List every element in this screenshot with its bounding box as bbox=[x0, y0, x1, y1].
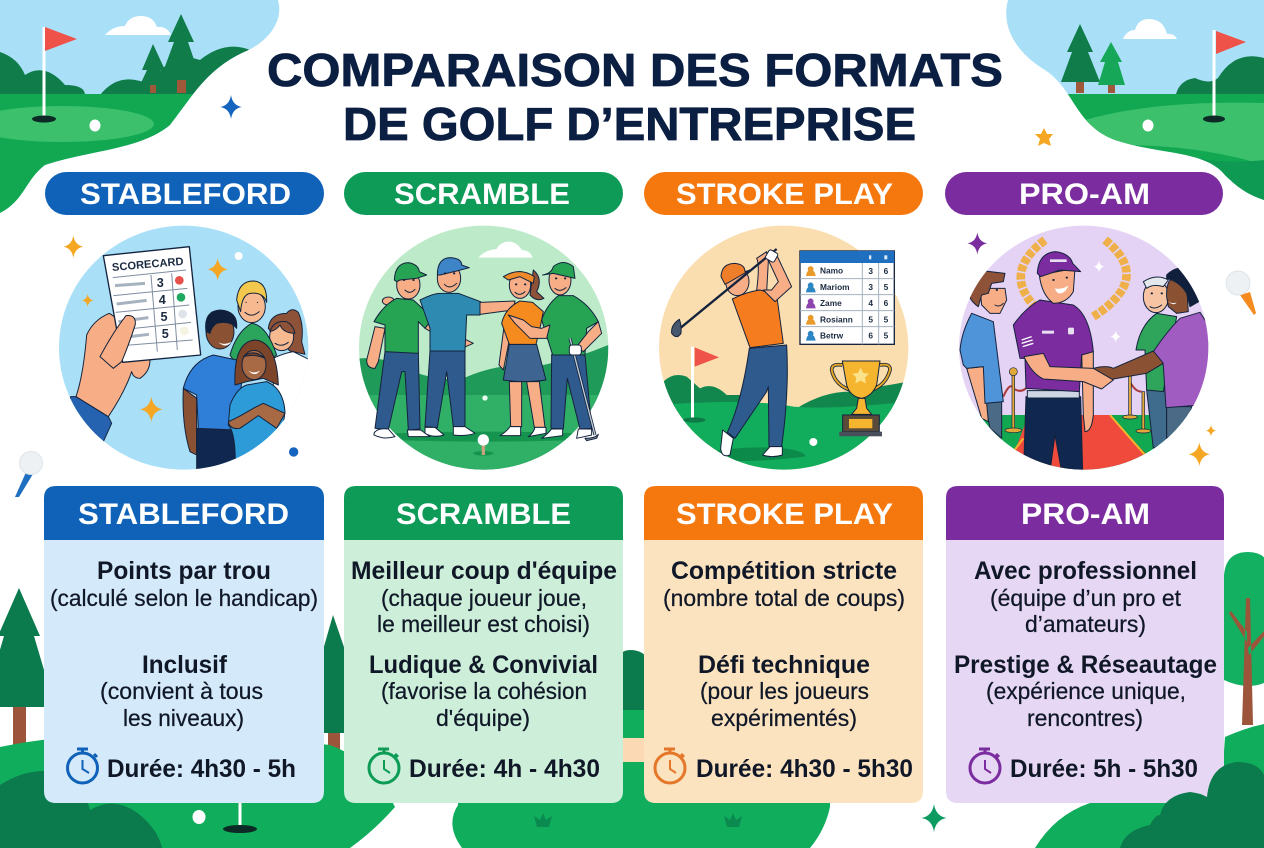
card: Scramble: Meilleur coup d'équipe bbox=[351, 557, 617, 585]
card: Scramble bbox=[344, 486, 623, 803]
pill: Scramble: SCRAMBLE bbox=[394, 178, 570, 211]
leaderboard: Mariom bbox=[820, 282, 850, 292]
card: Stableford: (calculé selon le handicap) bbox=[50, 585, 318, 611]
card: Pro-Am: Durée: 5h - 5h30 bbox=[1010, 755, 1198, 783]
leaderboard: 5 bbox=[868, 314, 873, 324]
title: DE GOLF D’ENTREPRISE bbox=[343, 98, 916, 150]
leaderboard: Zame bbox=[820, 298, 842, 308]
shirt details and faces bbox=[995, 259, 1177, 347]
stanchions bbox=[1003, 365, 1151, 433]
leaderboard: 5 bbox=[884, 314, 889, 324]
scenery: top-right golf course bbox=[1000, 0, 1264, 205]
icon: stopwatch bbox=[655, 749, 685, 783]
card: Scramble: (favorise la cohésion bbox=[381, 678, 587, 704]
golf ball on tee bbox=[473, 434, 493, 456]
illustration: Scramble team bbox=[359, 226, 608, 472]
illustration: Stableford scorecard and team bbox=[59, 226, 310, 472]
leaderboard: 3 bbox=[868, 282, 873, 292]
trophy bbox=[832, 361, 890, 436]
pill: Scramble bbox=[344, 172, 623, 215]
card: Stableford: (convient à tous bbox=[100, 678, 263, 704]
pill: Stableford bbox=[45, 172, 324, 215]
card: Stroke Play: (nombre total de coups) bbox=[663, 585, 905, 611]
flag bbox=[683, 347, 719, 423]
scorecard: 4 bbox=[159, 293, 166, 307]
card: Scramble: d'équipe) bbox=[436, 705, 530, 731]
icon: golf ball on blue tee bbox=[15, 452, 42, 497]
sparkles bbox=[967, 232, 1216, 466]
scorecard: SCORECARD bbox=[112, 256, 184, 274]
scorecard: 5 bbox=[160, 310, 168, 324]
card: Scramble: (chaque joueur joue, bbox=[381, 585, 587, 611]
scenery: bottom-right hill and tree bbox=[1035, 552, 1264, 848]
card: Stableford: STABLEFORD bbox=[78, 498, 289, 531]
icon: golf ball on orange tee bbox=[1226, 271, 1256, 315]
player 2 in blue bbox=[420, 258, 515, 436]
title: COMPARAISON DES FORMATS bbox=[267, 44, 1003, 96]
leaderboard: 5 bbox=[884, 330, 889, 340]
scorecard: 3 bbox=[157, 276, 164, 290]
leaderboard: 3 bbox=[868, 266, 873, 276]
player 4 in green with club bbox=[508, 262, 602, 441]
card: Stroke Play bbox=[644, 486, 923, 803]
card: Pro-Am bbox=[946, 486, 1224, 803]
icon: stopwatch bbox=[369, 749, 399, 783]
faces bbox=[404, 273, 566, 294]
card: Pro-Am: Avec professionnel bbox=[974, 557, 1197, 585]
pill: Stroke Play bbox=[644, 172, 923, 215]
scenery: bottom-left hill with trees bbox=[0, 588, 395, 848]
man in blue bbox=[183, 310, 242, 472]
leaderboard: 5 bbox=[884, 282, 889, 292]
icon: gold star bbox=[1035, 128, 1053, 146]
leaderboard bbox=[800, 251, 894, 344]
leaderboard: Namo bbox=[820, 266, 843, 276]
leaderboard: 6 bbox=[884, 298, 889, 308]
pro golfer in purple bbox=[1013, 252, 1093, 472]
golf hole with ball at bottom bbox=[192, 803, 257, 833]
card: Stroke Play: Compétition stricte bbox=[671, 557, 897, 585]
card: Scramble: le meilleur est choisi) bbox=[377, 611, 590, 637]
icon: green sparkle bbox=[921, 804, 947, 832]
card: Stroke Play: Durée: 4h30 - 5h30 bbox=[696, 755, 913, 783]
icon: blue sparkle bbox=[220, 95, 242, 119]
woman in light blue bbox=[228, 340, 285, 460]
card: Pro-Am: (expérience unique, bbox=[986, 678, 1186, 704]
pill: Stableford: STABLEFORD bbox=[80, 178, 291, 211]
card: Stableford: les niveaux) bbox=[123, 705, 244, 731]
pill: Pro-Am: PRO-AM bbox=[1019, 178, 1150, 211]
sparkles bbox=[63, 235, 228, 422]
scenery: top-left golf course bbox=[0, 0, 290, 215]
card: Stroke Play: Défi technique bbox=[698, 651, 870, 679]
pill: Stroke Play: STROKE PLAY bbox=[676, 178, 893, 211]
scenery: foreground bush bottom-right bbox=[1090, 762, 1264, 848]
card: Pro-Am: rencontres) bbox=[1027, 705, 1143, 731]
thumb bbox=[100, 316, 135, 368]
sleeve bbox=[70, 396, 112, 442]
man in blue shirt bbox=[960, 271, 1007, 438]
card: Stableford bbox=[44, 486, 324, 803]
card: Pro-Am: d’amateurs) bbox=[1025, 611, 1146, 637]
leaderboard: 6 bbox=[868, 330, 873, 340]
golfer bbox=[672, 249, 792, 457]
player 3 in orange bbox=[499, 270, 546, 437]
scenery: bottom-centre hill and path bbox=[452, 650, 830, 848]
handshake bbox=[1024, 351, 1163, 389]
hand bbox=[76, 313, 150, 417]
man with dark skin in purple bbox=[1153, 267, 1209, 438]
card: Scramble: SCRAMBLE bbox=[396, 498, 571, 531]
card: Stroke Play: (pour les joueurs bbox=[700, 678, 869, 704]
card: Pro-Am: PRO-AM bbox=[1021, 498, 1150, 531]
card: Scramble: Ludique & Convivial bbox=[369, 651, 598, 679]
card: Stableford: Inclusif bbox=[142, 651, 228, 679]
illustration: Stroke Play golfer bbox=[659, 226, 908, 472]
card: Stableford: Durée: 4h30 - 5h bbox=[107, 755, 296, 783]
leaderboard: 4 bbox=[868, 298, 873, 308]
player 1 in green bbox=[367, 263, 473, 438]
scorecard bbox=[103, 247, 201, 362]
card: Stableford: Points par trou bbox=[97, 557, 271, 585]
illustration: Pro-Am handshake bbox=[957, 226, 1216, 473]
leaderboard: 6 bbox=[884, 266, 889, 276]
card: Pro-Am: (équipe d’un pro et bbox=[990, 585, 1182, 611]
leaderboard: Betrw bbox=[820, 330, 844, 340]
icon: stopwatch bbox=[970, 749, 1000, 783]
title bbox=[267, 44, 1003, 150]
laurels bbox=[1021, 240, 1127, 317]
man with grey hair in green bbox=[1136, 277, 1177, 448]
card: Stroke Play: expérimentés) bbox=[711, 705, 857, 731]
leaderboard: Rosiann bbox=[820, 314, 853, 324]
pill: Pro-Am bbox=[945, 172, 1223, 215]
icon: stopwatch bbox=[68, 749, 98, 783]
scorecard: 5 bbox=[162, 327, 169, 341]
card: Pro-Am: Prestige & Réseautage bbox=[954, 651, 1217, 679]
woman in white shirt bbox=[268, 310, 310, 427]
card: Scramble: Durée: 4h - 4h30 bbox=[409, 755, 600, 783]
blond man in green bbox=[230, 281, 277, 365]
card: Stroke Play: STROKE PLAY bbox=[676, 498, 893, 531]
